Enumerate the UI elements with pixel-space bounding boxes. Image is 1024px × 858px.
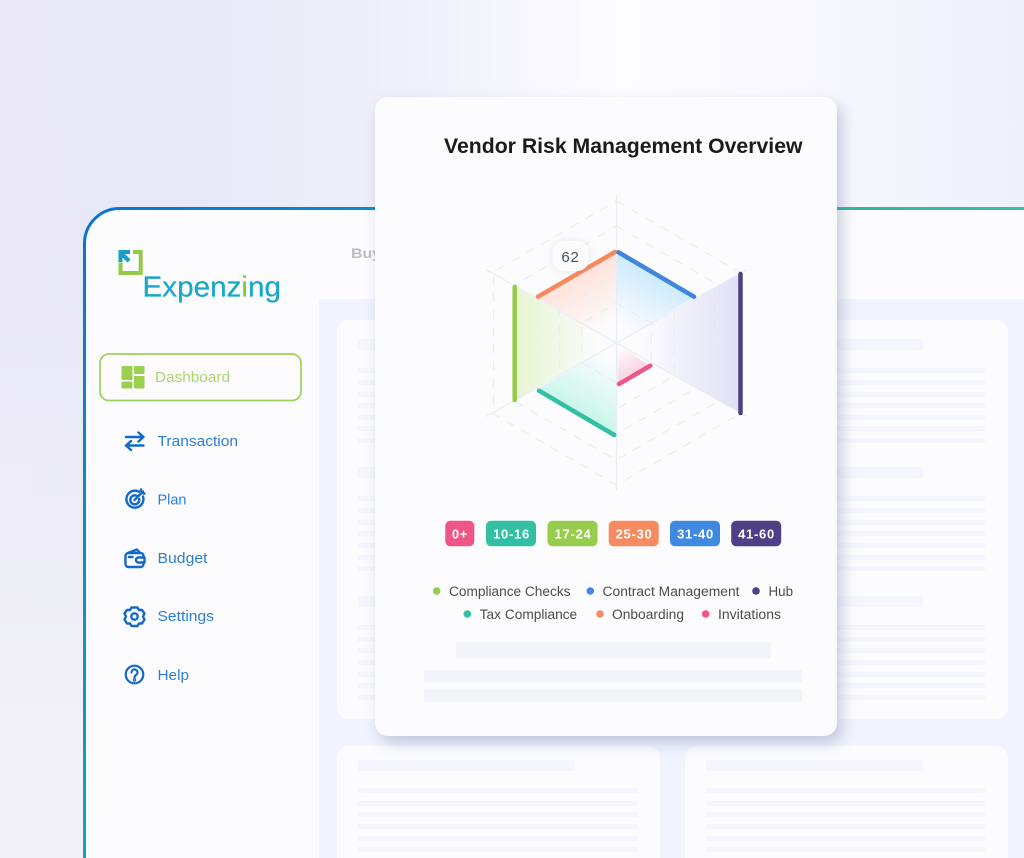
legend item: Hub: Hub (768, 584, 793, 599)
nav item: Dashboard (100, 354, 301, 400)
nav item: Settings: Settings (158, 608, 214, 625)
badge: 25-30: 25-30 (616, 526, 652, 542)
badge: 17-24 (548, 521, 598, 546)
radar chart (486, 195, 747, 490)
icon: wallet (126, 550, 144, 567)
icon: question mark (126, 666, 143, 683)
series: Hub fill (616, 274, 740, 413)
panel: vendor risk card (375, 97, 837, 736)
wordmark: Expenzing (142, 272, 281, 304)
icon: gear (124, 608, 144, 626)
badge: 0+ (445, 521, 474, 546)
nav item: Transaction (126, 432, 238, 450)
panel: bottom right card (685, 746, 1008, 858)
badge: 10-16: 10-16 (493, 526, 530, 542)
nav item: Plan (126, 490, 186, 508)
badge: 31-40: 31-40 (677, 526, 714, 542)
nav item: Settings (124, 608, 214, 626)
series: Compliance Checks fill (515, 287, 616, 400)
icon: logo square (118, 250, 143, 275)
callout: 62 (552, 241, 588, 271)
badge: 31-40 (670, 521, 720, 546)
legend item: Compliance Checks: Compliance Checks (449, 584, 571, 599)
badge: 41-60 (731, 521, 781, 546)
nav item: Dashboard: Dashboard (155, 369, 230, 386)
header tab text: Buy (351, 245, 381, 261)
title: Vendor Risk Management Overview (444, 135, 803, 158)
legend item: Contract Management: Contract Management (602, 584, 740, 599)
legend item: Hub (752, 584, 793, 599)
icon: target (126, 490, 144, 508)
series: Onboarding fill (537, 252, 616, 343)
callout: 62: 62 (561, 249, 580, 266)
panel: top content card (337, 320, 1008, 719)
badge: 0+: 0+ (452, 526, 468, 542)
nav item: Transaction: Transaction (158, 433, 238, 450)
series edges (515, 252, 740, 435)
nav item: Plan: Plan (158, 492, 186, 508)
badge: 17-24: 17-24 (555, 526, 591, 542)
icon: transfer arrows (126, 432, 144, 450)
logo: Expenzing (118, 250, 281, 304)
legend item: Tax Compliance: Tax Compliance (480, 607, 577, 622)
series: Invitations fill (616, 343, 650, 385)
badges: score ranges (445, 521, 781, 546)
badge: 41-60: 41-60 (738, 526, 775, 542)
legend item: Invitations: Invitations (718, 607, 781, 622)
nav item: Help (126, 666, 189, 684)
placeholder text bars (424, 642, 802, 702)
radar grid (486, 195, 747, 490)
panel: bottom left card (337, 746, 660, 858)
badge: 25-30 (609, 521, 659, 546)
series: Tax Compliance fill (538, 343, 616, 435)
icon: dashboard grid (122, 366, 144, 388)
nav item: Budget (126, 550, 208, 567)
series: Contract Management fill (616, 252, 695, 343)
nav item: Budget: Budget (158, 550, 208, 567)
nav item: Help: Help (158, 667, 189, 684)
legend (433, 584, 793, 622)
badge: 10-16 (486, 521, 536, 546)
legend item: Onboarding: Onboarding (612, 607, 684, 622)
